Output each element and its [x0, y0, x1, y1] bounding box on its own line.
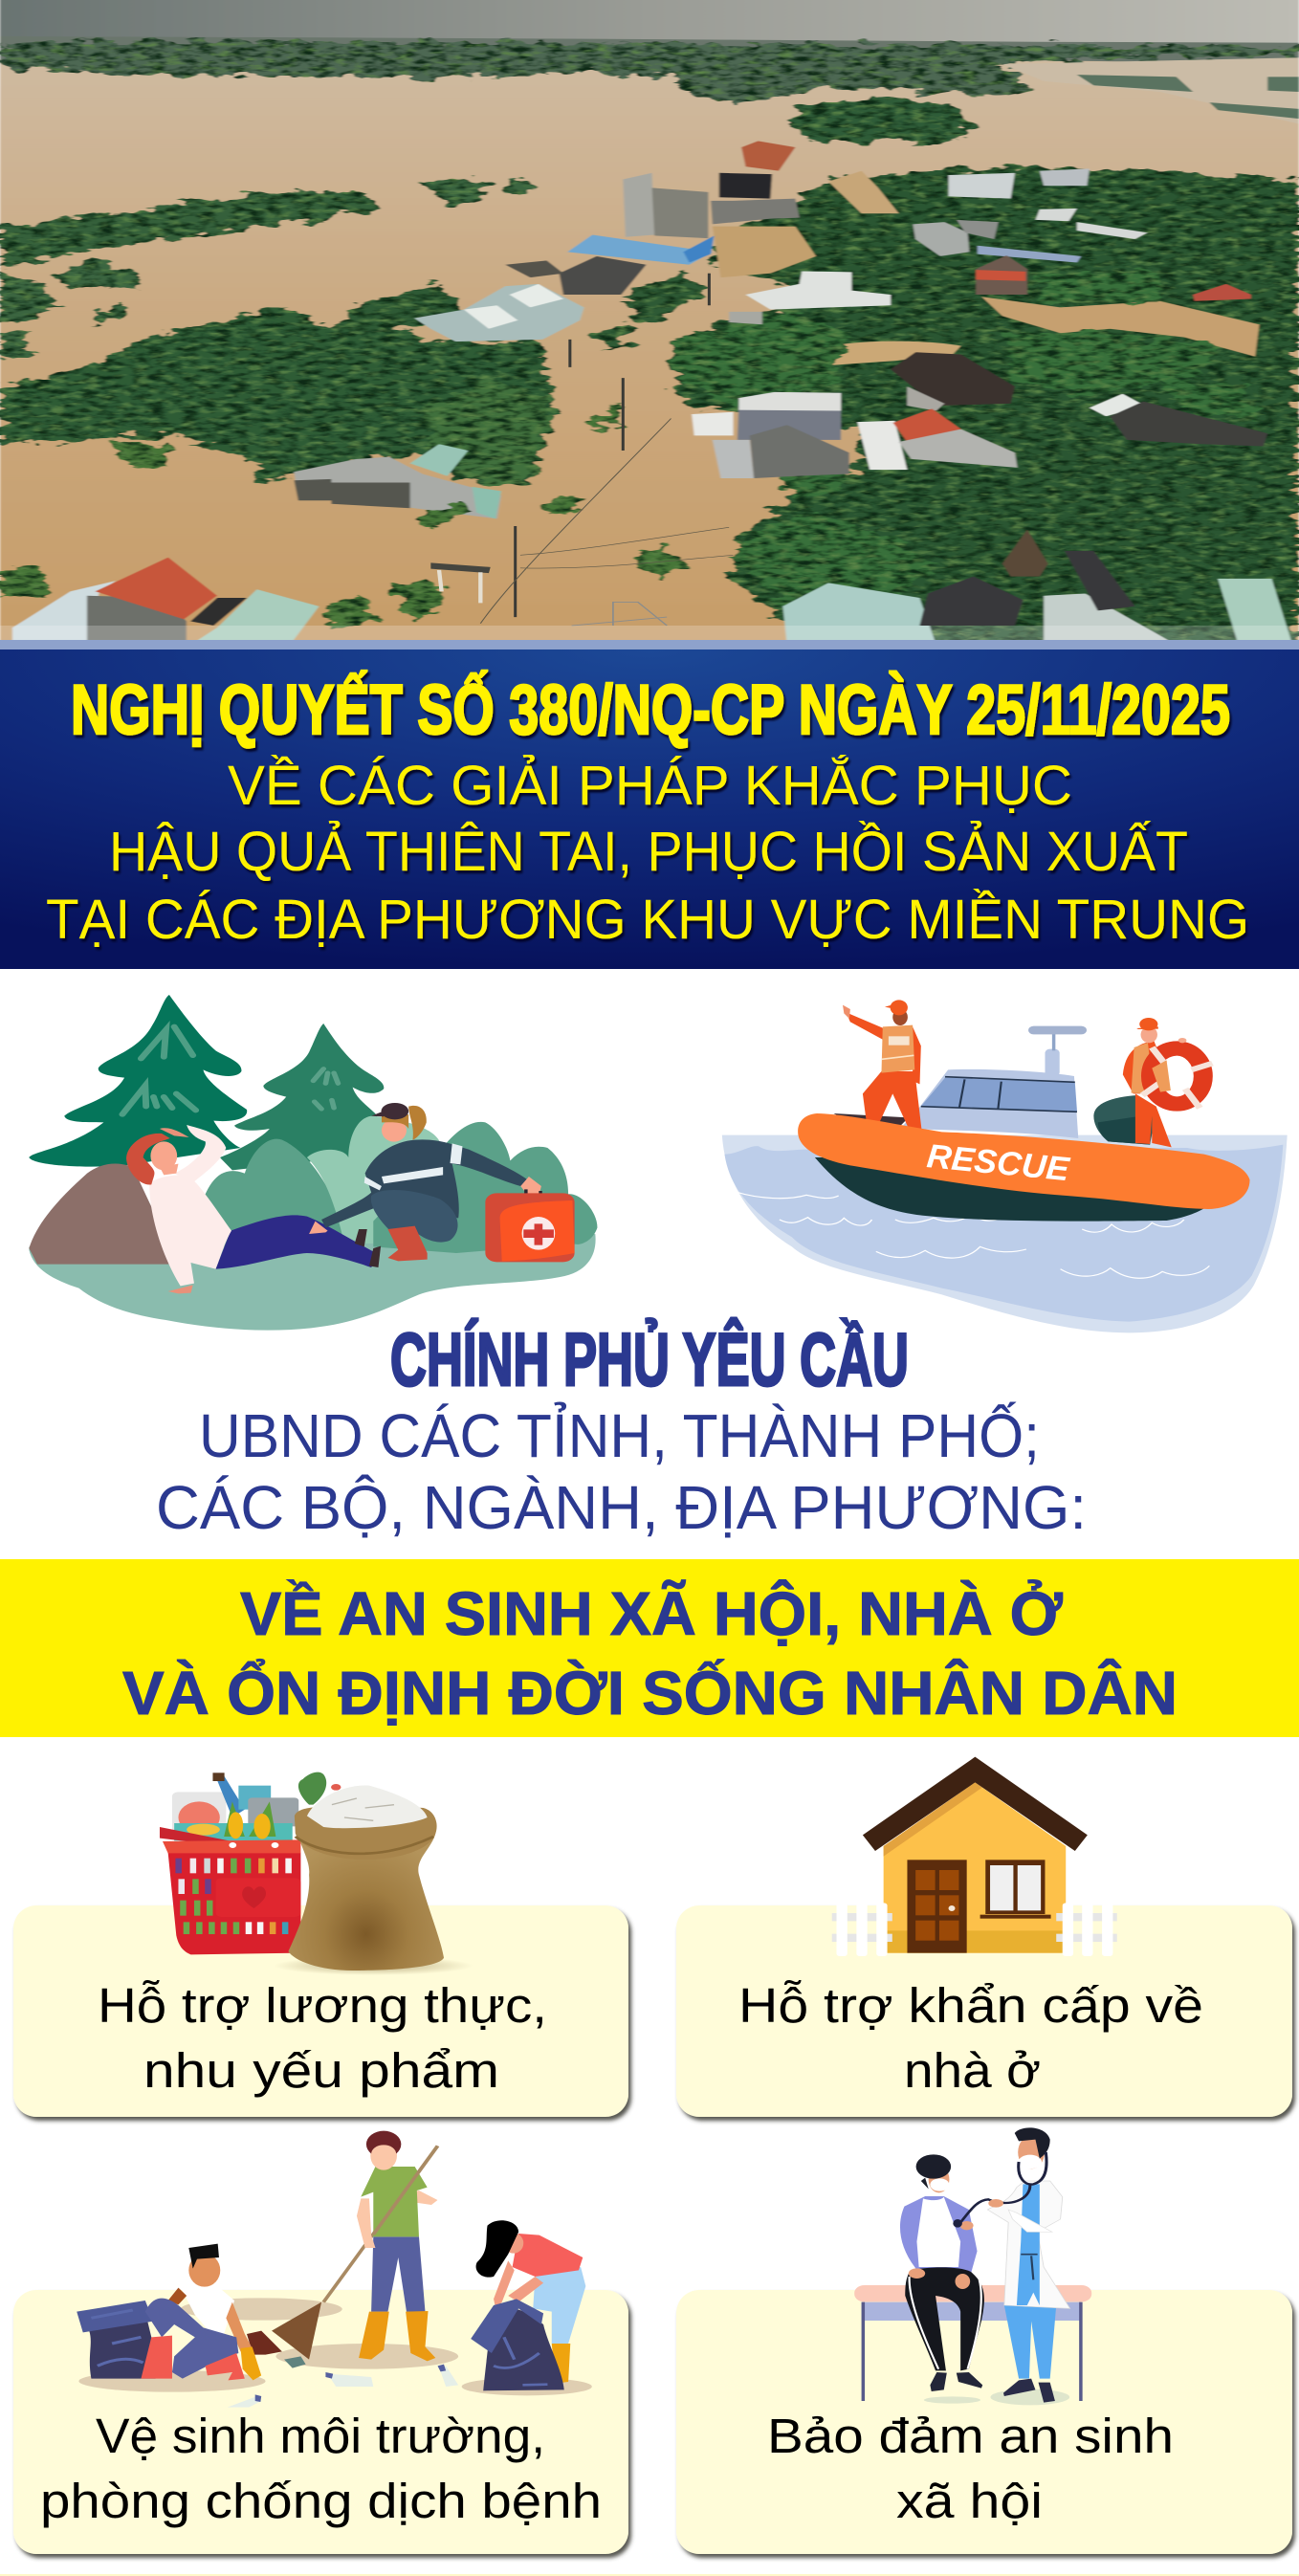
panel: title [0, 650, 1299, 969]
medical kit [485, 1189, 575, 1262]
card text: environment sanitation: Vệ sinh môi trường, [96, 2409, 545, 2463]
card text: social security: Bảo đảm an sinh [767, 2409, 1174, 2463]
illustration: rescue boat on water [722, 1000, 1288, 1332]
illustration: people cleaning environment [77, 2131, 592, 2408]
card: environment sanitation [13, 2290, 628, 2554]
card text: social security [767, 2409, 1174, 2528]
boat label: RESCUE [925, 1137, 1072, 1188]
card text: food support [98, 1978, 547, 2098]
man kneeling with bag [77, 2244, 261, 2380]
patient [900, 2154, 984, 2391]
card text: environment sanitation [40, 2409, 602, 2528]
panel: yellow section heading [0, 1559, 1299, 1737]
card: food support [13, 1905, 628, 2117]
rescuer holding life ring [1123, 1018, 1212, 1147]
section heading line 2: VÀ ỔN ĐỊNH ĐỜI SỐNG NHÂN DÂN [122, 1658, 1178, 1728]
heading line 2: UBND CÁC TỈNH, THÀNH PHỐ; [199, 1400, 1040, 1470]
card text line 2: xã hội [896, 2474, 1043, 2528]
card text line 2: phòng chống dịch bệnh [40, 2474, 602, 2528]
man sweeping [357, 2131, 438, 2361]
section heading line 1: VỀ AN SINH XÃ HỘI, NHÀ Ở [240, 1578, 1063, 1648]
rescuer [309, 1103, 541, 1261]
illustration: doctor examining patient [854, 2127, 1091, 2405]
card text line 2: nhà ở [904, 2043, 1041, 2098]
icon: food basket and rice sack [160, 1772, 473, 1975]
card text: housing support: Hỗ trợ khẩn cấp về [738, 1978, 1203, 2033]
heading line 3: CÁC BỘ, NGÀNH, ĐỊA PHƯƠNG: [156, 1473, 1087, 1542]
title line 3: HẬU QUẢ THIÊN TAI, PHỤC HỒI SẢN XUẤT [109, 821, 1188, 883]
decorative light blue strip above title panel [0, 640, 1299, 650]
broom [323, 2146, 438, 2302]
card text: housing support [738, 1978, 1203, 2098]
title line 4: TẠI CÁC ĐỊA PHƯƠNG KHU VỰC MIỀN TRUNG [46, 889, 1249, 951]
title line 2: VỀ CÁC GIẢI PHÁP KHẮC PHỤC [228, 755, 1072, 817]
rescuer standing left [843, 1000, 922, 1132]
icon: house [832, 1757, 1117, 1956]
heading: government requires: CHÍNH PHỦ YÊU CẦU [390, 1317, 909, 1401]
card text line 2: nhu yếu phẩm [143, 2043, 499, 2098]
injured woman [126, 1125, 381, 1293]
card: social security [676, 2290, 1292, 2554]
woman with bag [471, 2220, 585, 2390]
card: housing support [676, 1905, 1292, 2117]
photo: flooded village aerial view [0, 0, 1299, 650]
illustration: rescuer helping injured woman in forest [29, 995, 597, 1331]
heading: government requires [156, 1317, 1087, 1542]
doctor [953, 2127, 1070, 2403]
card text: food support: Hỗ trợ lương thực, [98, 1978, 547, 2033]
